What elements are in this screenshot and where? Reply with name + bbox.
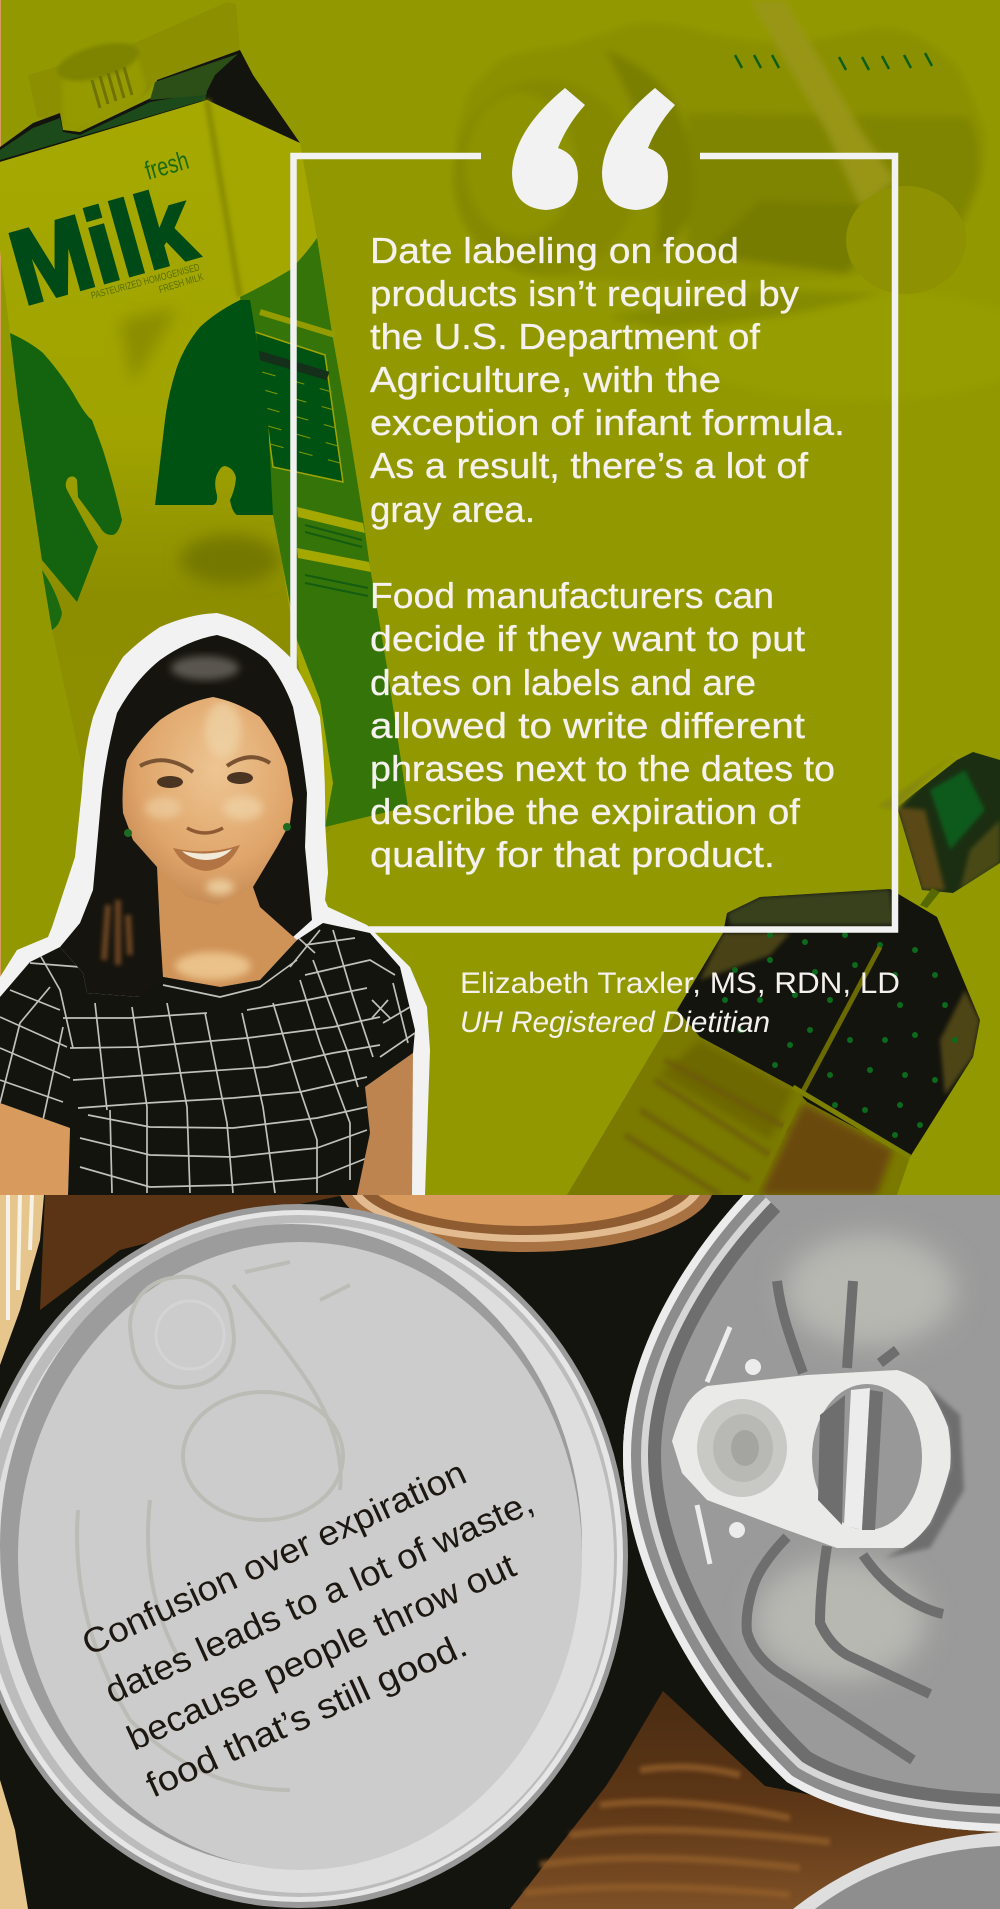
right arm — [357, 1053, 413, 1195]
ring pull shadow — [885, 1386, 964, 1558]
icon: quotation marks — [512, 88, 675, 210]
wood table top — [40, 1195, 345, 1310]
right tin can — [600, 1185, 1000, 1845]
quote paragraph one: Date labeling on food — [370, 230, 739, 271]
white cutout halo — [0, 613, 430, 1195]
quote paragraph two: allowed to write different — [370, 705, 805, 746]
main tin can — [0, 1204, 628, 1908]
side panel green band — [240, 238, 408, 827]
background photo: formula bottle — [453, 0, 1000, 400]
attribution name: Elizabeth Traxler, MS, RDN, LD — [460, 967, 900, 1000]
side panel pale strips — [297, 507, 371, 572]
right green drip — [155, 300, 273, 515]
fresh label: fresh — [141, 145, 192, 186]
carton side panel — [207, 100, 408, 827]
nose — [187, 828, 223, 833]
left arm — [0, 1103, 70, 1195]
bread bag clear base — [567, 1010, 910, 1195]
quote paragraph one: Agriculture, with the — [370, 359, 721, 400]
carton front face — [0, 100, 330, 900]
milk carton — [0, 2, 408, 900]
wood table bottom — [510, 1691, 1000, 1909]
eyes — [157, 772, 253, 788]
fresh milk label: FRESH MILK — [158, 272, 205, 296]
bread bag knot — [897, 752, 1000, 893]
caption line 1: Confusion over expiration — [76, 1453, 472, 1663]
plaid dress — [0, 923, 415, 1195]
can left edge bottom — [0, 1780, 28, 1909]
copper can top — [340, 1195, 712, 1252]
attribution title: UH Registered Dietitian — [460, 1006, 770, 1039]
face — [122, 697, 293, 905]
earrings — [124, 823, 291, 837]
quote paragraph two: decide if they want to put — [370, 618, 805, 659]
caption line 2: dates leads to a lot of waste, — [99, 1483, 539, 1711]
quote paragraph one: As a result, there’s a lot of — [370, 445, 809, 486]
lower green drip — [42, 570, 62, 630]
can grooves — [747, 1281, 943, 1760]
quote paragraph one: exception of infant formula. — [370, 402, 845, 443]
quote paragraph two: quality for that product. — [370, 834, 775, 875]
brows — [140, 757, 270, 772]
tin can bottom right — [793, 1832, 1000, 1909]
quote paragraph two: dates on labels and are — [370, 662, 756, 703]
caption line 3: because people throw out — [121, 1546, 522, 1758]
olive background panel — [0, 0, 1000, 1195]
quote paragraph two: describe the expiration of — [370, 791, 801, 832]
Milk wordmark: Milk — [0, 166, 206, 327]
pasteurized label: PASTEURIZED HOMOGENISED — [90, 262, 201, 302]
quote paragraph two: phrases next to the dates to — [370, 748, 835, 789]
lid highlights — [785, 1235, 955, 1345]
carton dark fold — [0, 50, 300, 162]
carton top flap — [28, 2, 240, 130]
attribution — [460, 967, 900, 1039]
can left edge top — [0, 1195, 44, 1365]
smile — [173, 845, 240, 871]
can rim rings — [623, 1185, 1000, 1832]
nutrition table — [255, 332, 343, 482]
bread bag dark body — [677, 889, 980, 1157]
bread loaf — [567, 752, 1000, 1195]
can lid caption — [76, 1453, 539, 1805]
embossed can pull tab — [77, 1262, 350, 1790]
ring pull — [672, 1370, 951, 1548]
caption line 4: food that’s still good. — [140, 1625, 473, 1805]
neck and chest — [157, 867, 297, 987]
canned food photo panel — [0, 1118, 1000, 1909]
quote frame — [294, 156, 895, 930]
hair — [60, 635, 312, 1000]
left green drip — [10, 333, 122, 602]
quote paragraph one: the U.S. Department of — [370, 316, 761, 357]
carton cap — [62, 46, 145, 130]
woman portrait — [0, 613, 430, 1195]
quote paragraph two: Food manufacturers can — [370, 575, 774, 616]
quote paragraph one: gray area. — [370, 489, 535, 530]
quote paragraph one: products isn’t required by — [370, 273, 799, 314]
